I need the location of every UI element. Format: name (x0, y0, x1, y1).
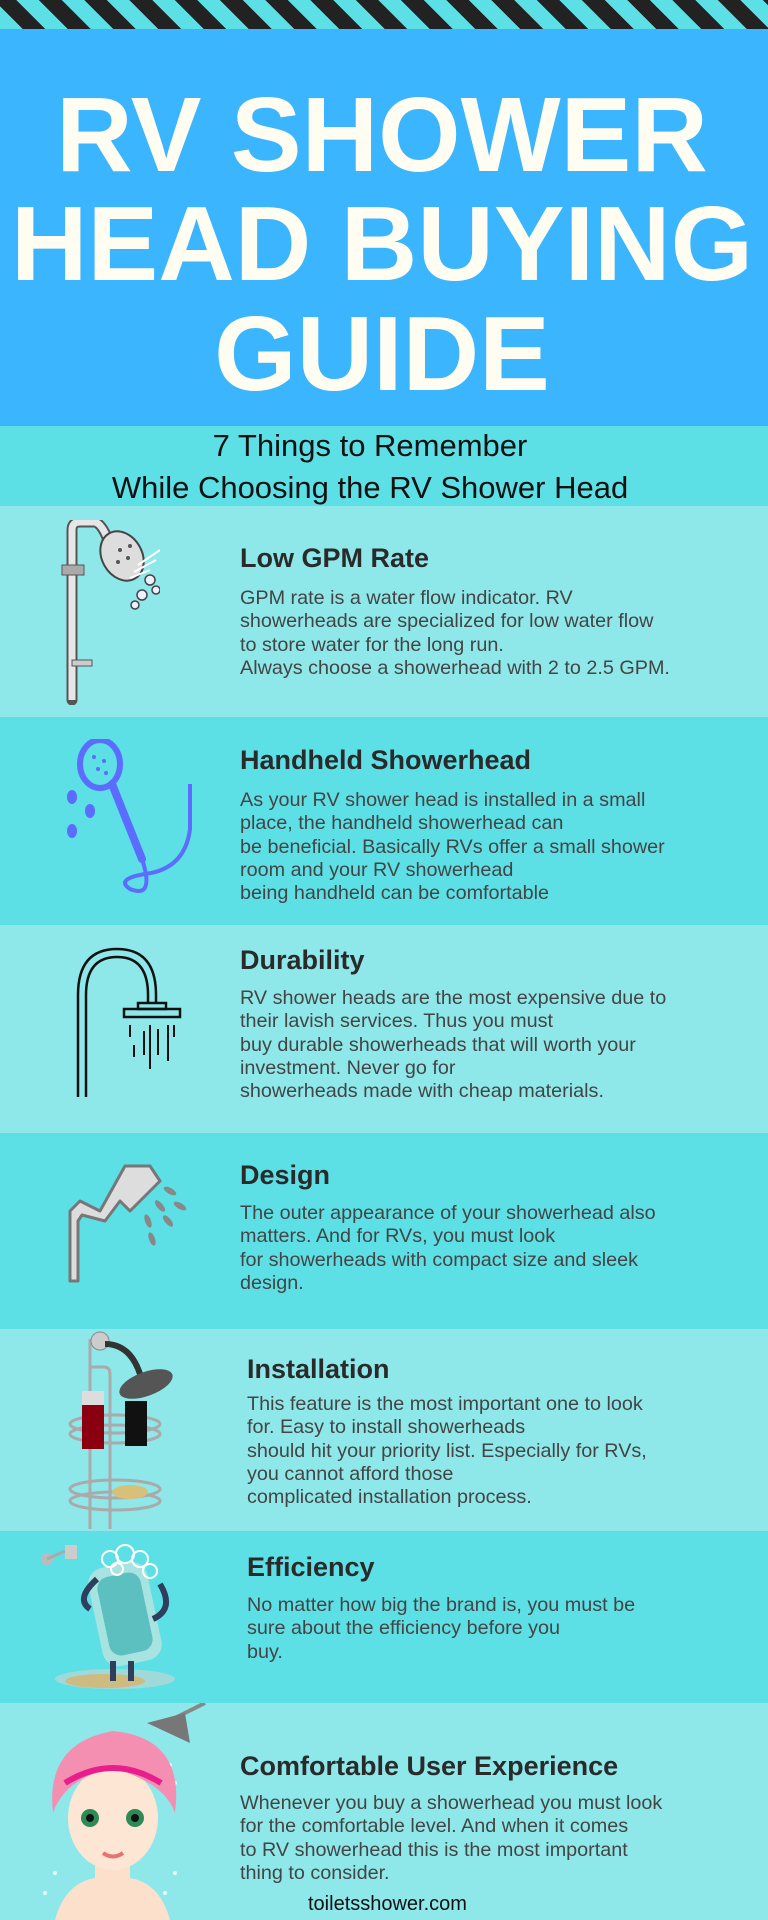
text: their lavish services. Thus you must (240, 1010, 553, 1032)
icon: arch shower (76, 948, 182, 1097)
text: investment. Never go for (240, 1057, 456, 1079)
text: should hit your priority list. Especially for RVs, (247, 1440, 647, 1462)
panel: low gpm (0, 506, 768, 717)
icon: soap character (41, 1544, 175, 1689)
text: buy durable showerheads that will worth your (240, 1034, 636, 1056)
text: Always choose a showerhead with 2 to 2.5 GPM. (240, 657, 670, 679)
text: Whenever you buy a showerhead you must look (240, 1792, 662, 1814)
text: to store water for the long run. (240, 634, 504, 656)
heading: Low GPM Rate (240, 543, 429, 573)
text: matters. And for RVs, you must look (240, 1225, 555, 1247)
text: for showerheads with compact size and sleek (240, 1249, 638, 1271)
text: for. Easy to install showerheads (247, 1416, 525, 1438)
text (247, 1594, 635, 1663)
heading: Installation (247, 1354, 390, 1384)
text: RV shower heads are the most expensive due to (240, 987, 666, 1009)
footer url: toiletsshower.com (308, 1893, 467, 1915)
text: being handheld can be comfortable (240, 882, 549, 904)
text (240, 1792, 662, 1884)
heading: Efficiency (247, 1552, 375, 1582)
icon: handheld showerhead (67, 739, 192, 893)
text (240, 789, 665, 904)
heading: Design (240, 1160, 330, 1190)
icon: woman showering (43, 1703, 206, 1920)
text: sure about the efficiency before you (247, 1617, 560, 1639)
text: for the comfortable level. And when it comes (240, 1815, 628, 1837)
heading: Handheld Showerhead (240, 745, 531, 775)
text: showerheads made with cheap materials. (240, 1080, 604, 1102)
title: HEAD BUYING (11, 185, 753, 303)
subtitle: 7 Things to Remember (213, 428, 527, 463)
title: GUIDE (214, 295, 550, 413)
title: RV SHOWER (56, 76, 708, 194)
panel: durability (0, 925, 768, 1133)
text: showerheads are specialized for low water flow (240, 610, 653, 632)
text: you cannot afford those (247, 1463, 453, 1485)
panel: comfort (0, 1703, 768, 1920)
text: As your RV shower head is installed in a small (240, 789, 645, 811)
subtitle band (0, 426, 768, 506)
text: be beneficial. Basically RVs offer a small shower (240, 836, 665, 858)
text: design. (240, 1272, 304, 1294)
text (240, 987, 666, 1102)
text (240, 1202, 656, 1294)
panel: design (0, 1133, 768, 1329)
text: thing to consider. (240, 1862, 390, 1884)
subtitle: While Choosing the RV Shower Head (112, 470, 628, 505)
panel: handheld (0, 717, 768, 925)
heading: Durability (240, 945, 365, 975)
text: The outer appearance of your showerhead also (240, 1202, 656, 1224)
text: This feature is the most important one to look (247, 1393, 643, 1415)
text: to RV showerhead this is the most important (240, 1839, 628, 1861)
stripe border (0, 0, 768, 29)
heading: Comfortable User Experience (240, 1751, 618, 1781)
title (11, 76, 753, 413)
text: room and your RV showerhead (240, 859, 513, 881)
text: place, the handheld showerhead can (240, 812, 563, 834)
icon: design showerhead (68, 1164, 186, 1282)
icon: shower rod (62, 520, 160, 705)
panel: installation (0, 1329, 768, 1531)
text: No matter how big the brand is, you must be (247, 1594, 635, 1616)
text (240, 587, 670, 679)
header panel (0, 29, 768, 426)
text: GPM rate is a water flow indicator. RV (240, 587, 573, 609)
panel: efficiency (0, 1531, 768, 1703)
icon: shower caddy (68, 1332, 173, 1529)
text: buy. (247, 1641, 283, 1663)
text (247, 1393, 647, 1508)
subtitle (112, 428, 628, 505)
text: complicated installation process. (247, 1486, 532, 1508)
